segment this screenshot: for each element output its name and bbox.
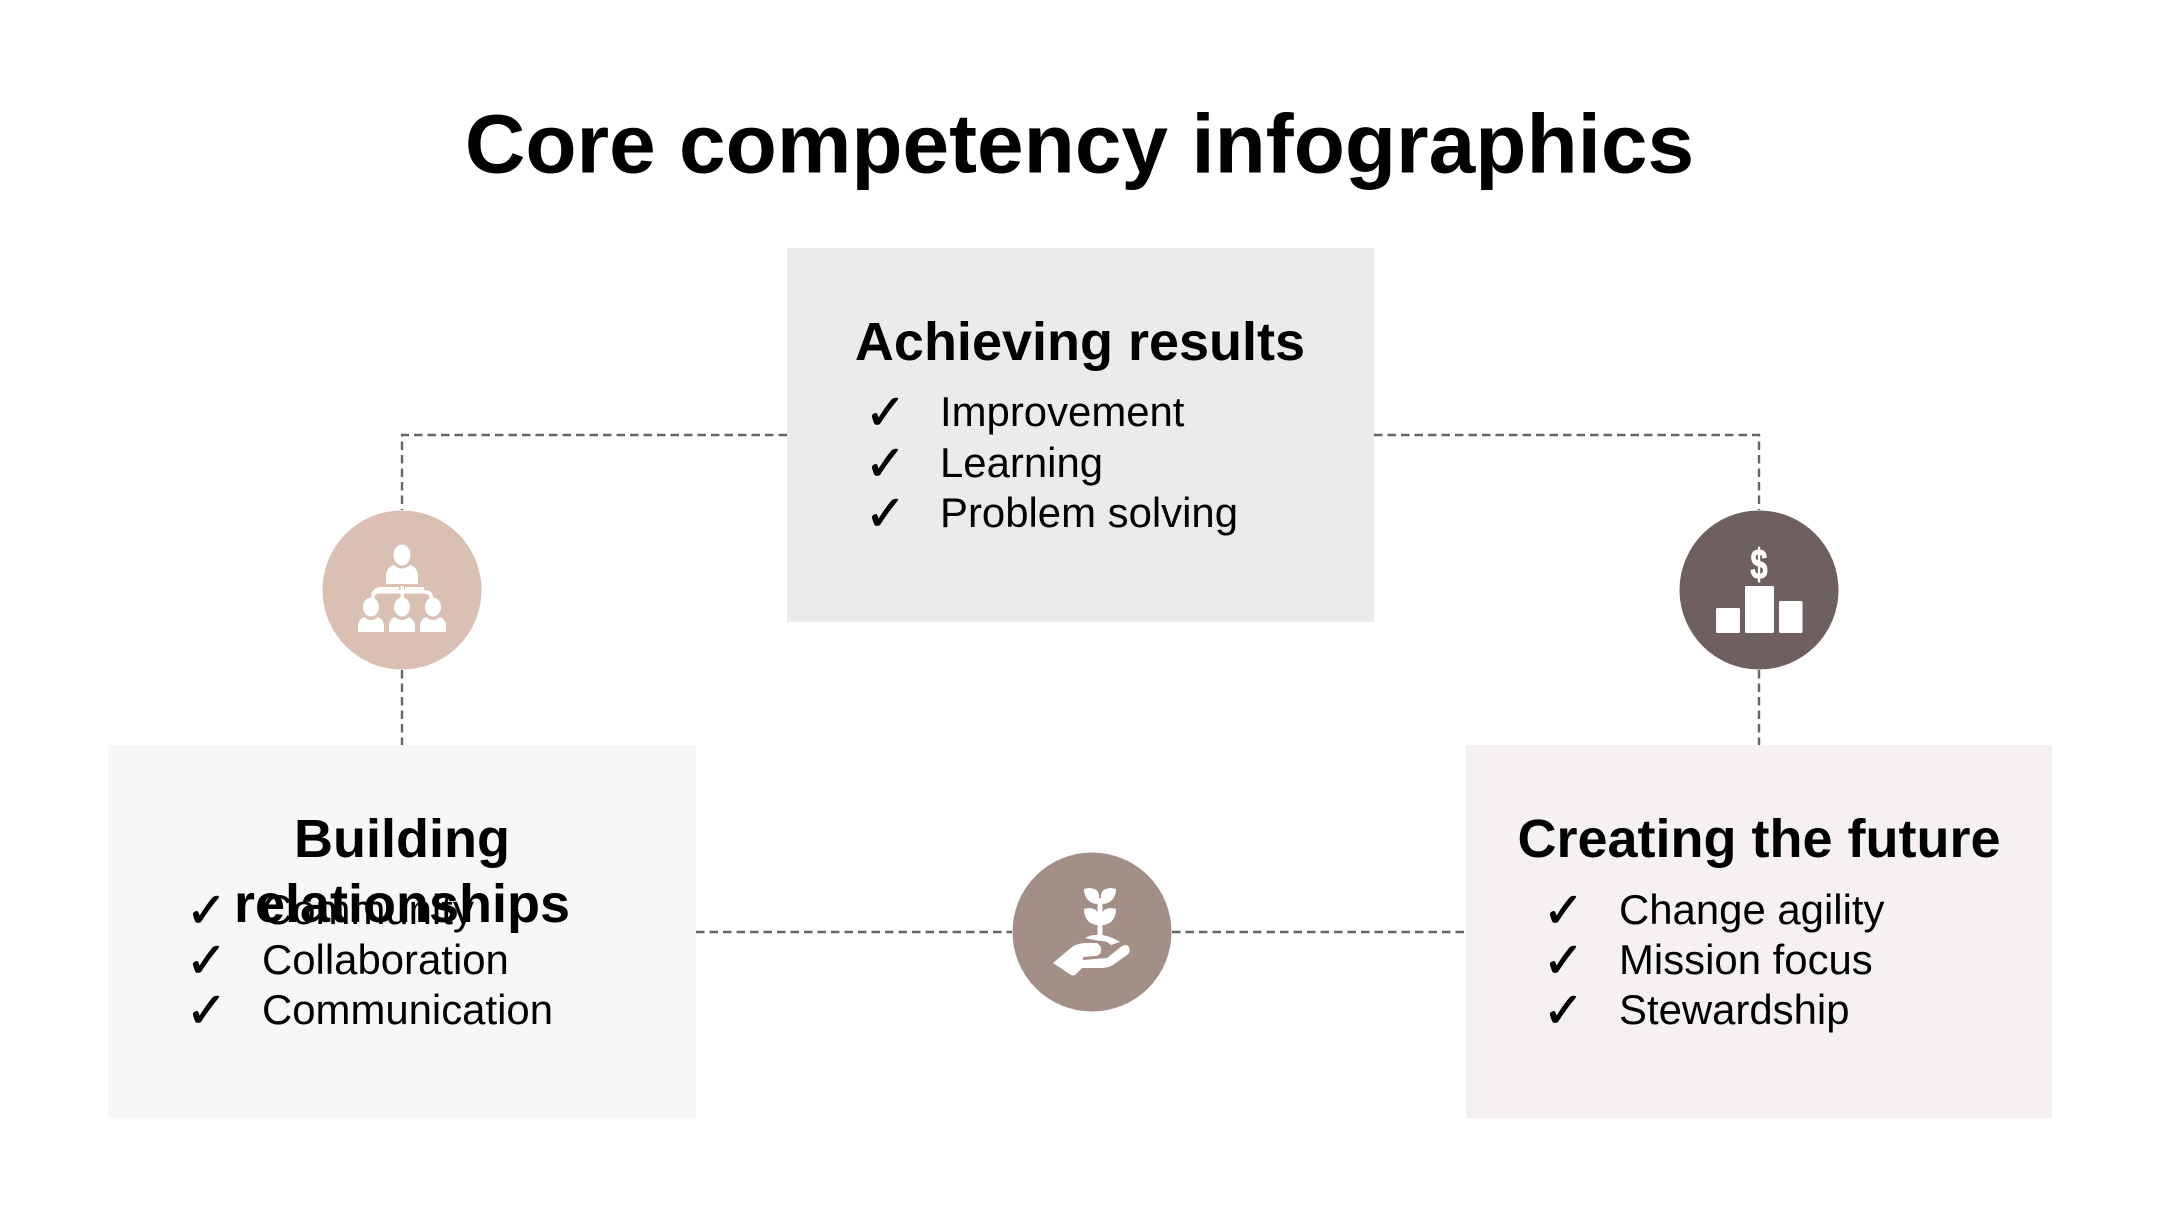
panel: achieving results bbox=[787, 248, 1374, 622]
list: creating the future: Stewardship bbox=[1619, 986, 1850, 1033]
list: creating the future: ✓ bbox=[1543, 882, 1584, 939]
list: achieving results: Problem solving bbox=[940, 489, 1238, 536]
list: creating the future: ✓ bbox=[1543, 932, 1584, 989]
panel: building relationships bbox=[108, 745, 696, 1118]
list: building relationships bbox=[186, 882, 553, 1039]
icon: podium with dollar bbox=[1680, 510, 1838, 670]
list: achieving results bbox=[865, 384, 1238, 542]
icon: organisation hierarchy bbox=[322, 510, 482, 670]
list: building relationships: Communication bbox=[262, 986, 553, 1033]
list: achieving results: Improvement bbox=[940, 388, 1185, 435]
list: creating the future: Change agility bbox=[1619, 886, 1885, 933]
list: building relationships: Community bbox=[262, 886, 474, 933]
list: achieving results: Learning bbox=[940, 439, 1103, 486]
list: achieving results: ✓ bbox=[865, 485, 906, 542]
list: building relationships: Collaboration bbox=[262, 936, 509, 983]
heading: building relationships: Building bbox=[294, 809, 510, 869]
title: Core competency infographics bbox=[465, 96, 1694, 190]
list: building relationships: ✓ bbox=[186, 932, 227, 989]
list: building relationships: ✓ bbox=[186, 982, 227, 1039]
list: creating the future bbox=[1543, 882, 1885, 1039]
list: achieving results: ✓ bbox=[865, 435, 906, 492]
heading: building relationships: relationships bbox=[234, 874, 570, 934]
list: creating the future: ✓ bbox=[1543, 982, 1584, 1039]
heading: creating the future: Creating the future bbox=[1517, 809, 2001, 869]
list: building relationships: ✓ bbox=[186, 882, 227, 939]
list: achieving results: ✓ bbox=[865, 384, 906, 441]
icon: podium with dollar: $ bbox=[1750, 540, 1768, 588]
panel: creating the future bbox=[1466, 745, 2052, 1118]
icon: hand holding plant bbox=[1012, 852, 1172, 1012]
heading: achieving results: Achieving results bbox=[855, 312, 1305, 372]
list: creating the future: Mission focus bbox=[1619, 936, 1873, 983]
